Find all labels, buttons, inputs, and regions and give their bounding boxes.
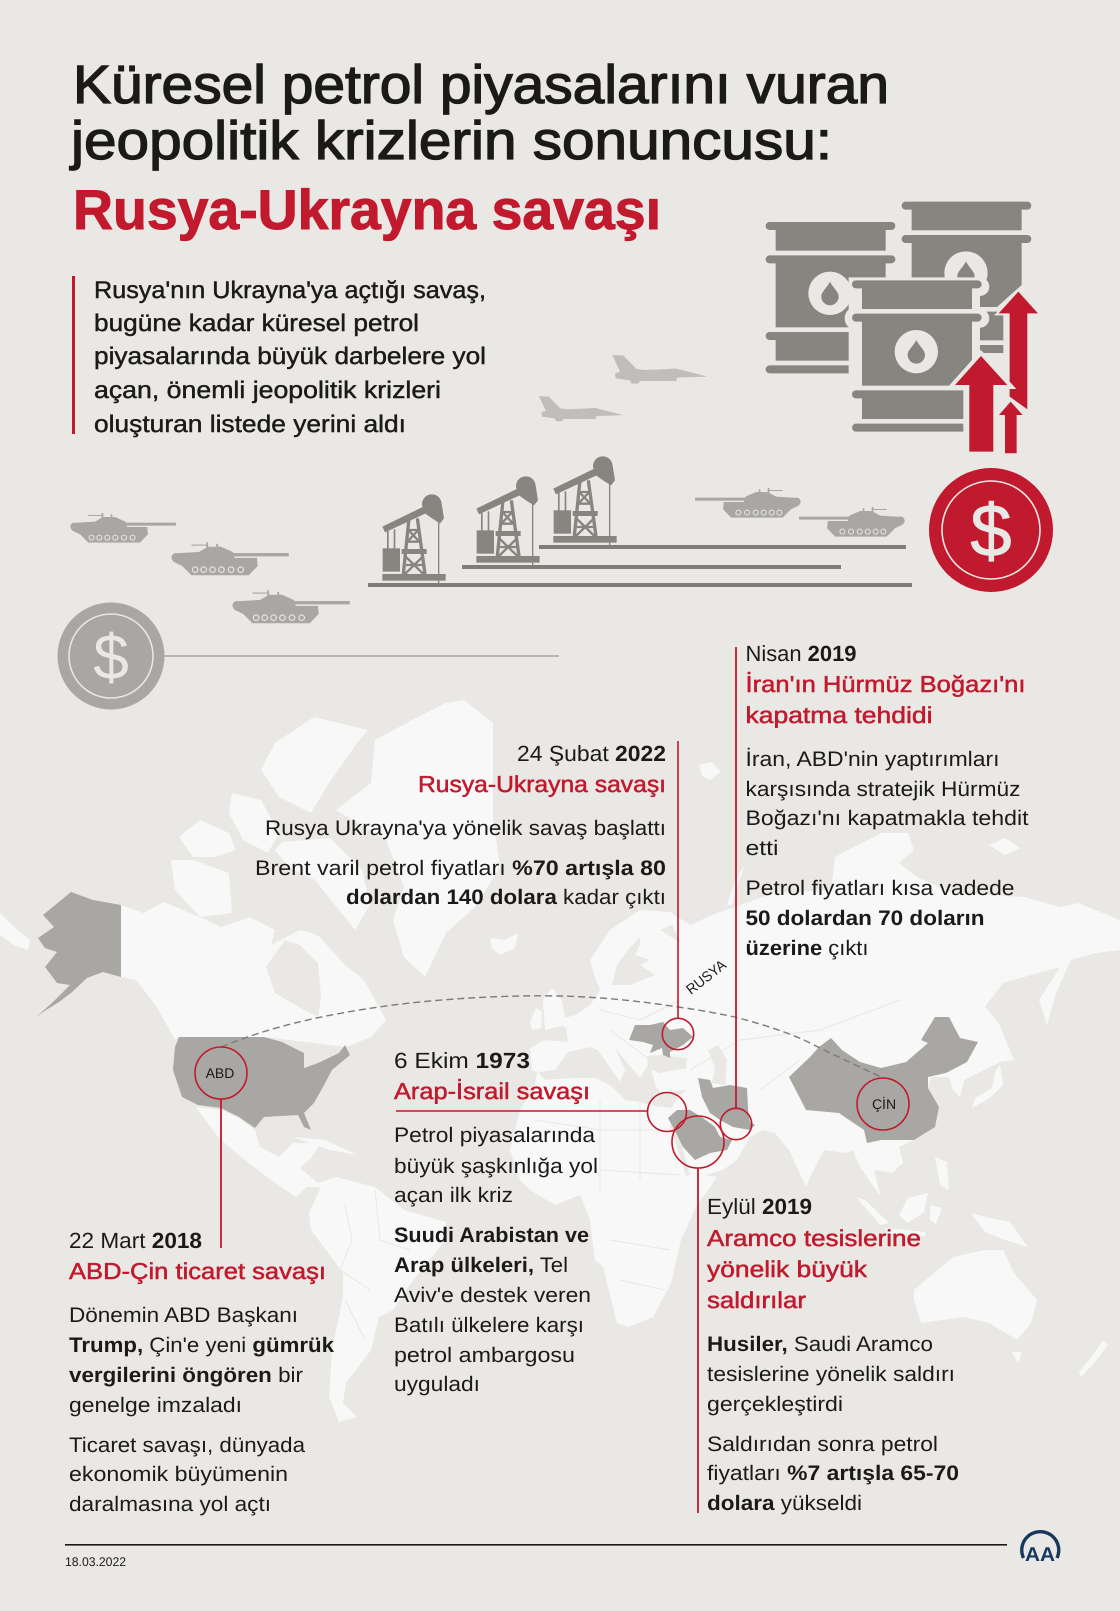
text block: Aramco: Eylül 2019 <box>707 1194 812 1219</box>
text block: Hürmüz: Boğazı'nı kapatmakla tehdit <box>746 807 1029 830</box>
text block: Hürmüz: Petrol fiyatları kısa vadede <box>746 877 1014 900</box>
text block: Rusya-Ukrayna: Brent varil petrol fiyatları %70 artışla 80 <box>255 857 666 880</box>
text block: ABD-Çin: Trump, Çin'e yeni gümrük <box>69 1334 334 1357</box>
text block: Arap-İsrail: Batılı ülkelere karşı <box>394 1314 584 1337</box>
intro text block <box>72 276 486 438</box>
marker: Çin <box>857 1078 909 1130</box>
icon: grey dollar coin: $ <box>93 621 129 693</box>
seas and lakes <box>266 903 727 1176</box>
marker: İran <box>720 647 752 1140</box>
icon: oil barrels with rising arrows <box>766 202 1050 457</box>
label: RUSYA: RUSYA <box>684 957 730 998</box>
text block: Arap-İsrail: 6 Ekim 1973 <box>394 1048 530 1073</box>
text block: ABD-Çin: 22 Mart 2018 <box>69 1228 202 1253</box>
icon: fighter jets <box>539 355 708 421</box>
intro text block: oluşturan listede yerini aldı <box>94 411 406 438</box>
text block: ABD-Çin: ekonomik büyümenin <box>69 1463 288 1486</box>
text block: Arap-İsrail: açan ilk kriz <box>394 1184 513 1207</box>
text block: Hürmüz: kapatma tehdidi <box>746 702 932 728</box>
date: 18.03.2022 <box>65 1555 126 1569</box>
country: Saudi Arabia <box>668 1110 732 1160</box>
dashed arc <box>221 996 881 1077</box>
text block: Hürmüz: Nisan 2019 <box>746 641 856 666</box>
title: jeopolitik krizlerin sonuncusu: <box>69 111 832 171</box>
icon: tanks <box>70 488 905 623</box>
ground lines <box>368 545 912 587</box>
barrel: back right <box>902 202 1031 353</box>
text block: Aramco: Husiler, Saudi Aramco <box>707 1333 933 1356</box>
marker: Israel <box>396 1092 686 1132</box>
text block: ABD-Çin: ABD-Çin ticaret savaşı <box>69 1258 326 1284</box>
arrow: tall <box>999 292 1038 409</box>
text block: Aramco: Aramco tesislerine <box>707 1225 921 1251</box>
text block: Aramco: yönelik büyük <box>707 1256 868 1282</box>
text block: Aramco: Saldırıdan sonra petrol <box>707 1433 938 1456</box>
icon: pump jacks <box>382 456 617 583</box>
text block: ABD-Çin: daralmasına yol açtı <box>69 1493 271 1516</box>
text block: Arap-İsrail: Arap ülkeleri, Tel <box>394 1254 568 1277</box>
country: USA <box>173 1037 350 1130</box>
text block: Rusya-Ukrayna: Rusya Ukrayna'ya yönelik savaş başlattı <box>265 817 666 840</box>
text block: Arap-İsrail: Aviv'e destek veren <box>394 1284 591 1307</box>
text block: Arap-İsrail: büyük şaşkınlığa yol <box>394 1155 598 1178</box>
country: Alaska <box>36 892 121 1017</box>
arrow: large <box>955 356 1007 452</box>
arrow: small <box>999 402 1023 453</box>
text block: ABD-Çin <box>69 1228 334 1516</box>
title: Küresel petrol piyasalarını vuran <box>73 55 889 115</box>
marker: Çin: ÇİN <box>872 1096 896 1112</box>
marker: ABD <box>195 1047 247 1248</box>
text block: Aramco: gerçekleştirdi <box>707 1393 843 1416</box>
logo: AA <box>1022 1532 1059 1566</box>
barrel: front <box>852 280 982 432</box>
country: Ukraine <box>629 1022 693 1058</box>
world map <box>0 700 1120 1422</box>
title <box>69 55 889 241</box>
text block: Aramco <box>707 1194 959 1515</box>
marker: Saudi <box>672 1116 724 1513</box>
intro text block: açan, önemli jeopolitik krizleri <box>94 377 441 404</box>
text block: Rusya-Ukrayna <box>255 741 666 909</box>
text block: Aramco: dolara yükseldi <box>707 1492 862 1515</box>
text block: Arap-İsrail: Petrol piyasalarında <box>394 1124 595 1147</box>
text block: Aramco: fiyatları %7 artışla 65-70 <box>707 1462 959 1485</box>
text block: ABD-Çin: Dönemin ABD Başkanı <box>69 1304 298 1327</box>
text block: Rusya-Ukrayna: 24 Şubat 2022 <box>517 741 666 766</box>
text block: Arap-İsrail: uyguladı <box>394 1373 480 1396</box>
logo: AA: AA <box>1025 1544 1055 1566</box>
text block: Hürmüz <box>746 641 1029 960</box>
country: China <box>789 1017 978 1143</box>
barrel: back left <box>766 222 895 373</box>
icon: red dollar coin: $ <box>970 489 1012 572</box>
title highlight: Rusya-Ukrayna savaşı <box>73 178 661 241</box>
intro text block: Rusya'nın Ukrayna'ya açtığı savaş, <box>94 277 486 304</box>
icon: grey dollar coin <box>58 602 559 710</box>
text block: Hürmüz: İran'ın Hürmüz Boğazı'nı <box>746 671 1026 697</box>
text block: Hürmüz: etti <box>746 837 778 860</box>
text block: Arap-İsrail: petrol ambargosu <box>394 1344 575 1367</box>
text block: ABD-Çin: Ticaret savaşı, dünyada <box>69 1434 305 1457</box>
icon: red dollar coin <box>929 468 1053 592</box>
footer rule <box>65 1544 1007 1546</box>
text block: Hürmüz: üzerine çıktı <box>746 937 868 960</box>
text block: Rusya-Ukrayna: Rusya-Ukrayna savaşı <box>418 771 666 797</box>
country: Iran <box>698 1078 755 1130</box>
halo behind front barrel <box>849 277 1050 457</box>
marker: Ukrayna <box>662 741 694 1050</box>
marker: ABD: ABD <box>206 1065 234 1081</box>
faint country borders <box>340 1000 900 1340</box>
text block: ABD-Çin: vergilerini öngören bir <box>69 1364 303 1387</box>
text block: ABD-Çin: genelge imzaladı <box>69 1394 242 1417</box>
intro text block: bugüne kadar küresel petrol <box>94 310 419 337</box>
text block: Hürmüz: İran, ABD'nin yaptırımları <box>746 747 1000 771</box>
text block: Hürmüz: 50 dolardan 70 doların <box>746 907 984 930</box>
text block: Aramco: saldırılar <box>707 1287 806 1313</box>
text block: Arap-İsrail: Arap-İsrail savaşı <box>394 1078 590 1104</box>
text block: Arap-İsrail <box>394 1048 598 1396</box>
intro text block: piyasalarında büyük darbelere yol <box>94 343 486 370</box>
text block: Rusya-Ukrayna: dolardan 140 dolara kadar çıktı <box>346 886 666 909</box>
text block: Aramco: tesislerine yönelik saldırı <box>707 1363 955 1386</box>
land masses <box>0 700 1120 1422</box>
text block: Hürmüz: karşısında stratejik Hürmüz <box>746 778 1020 801</box>
text block: Arap-İsrail: Suudi Arabistan ve <box>394 1224 589 1247</box>
